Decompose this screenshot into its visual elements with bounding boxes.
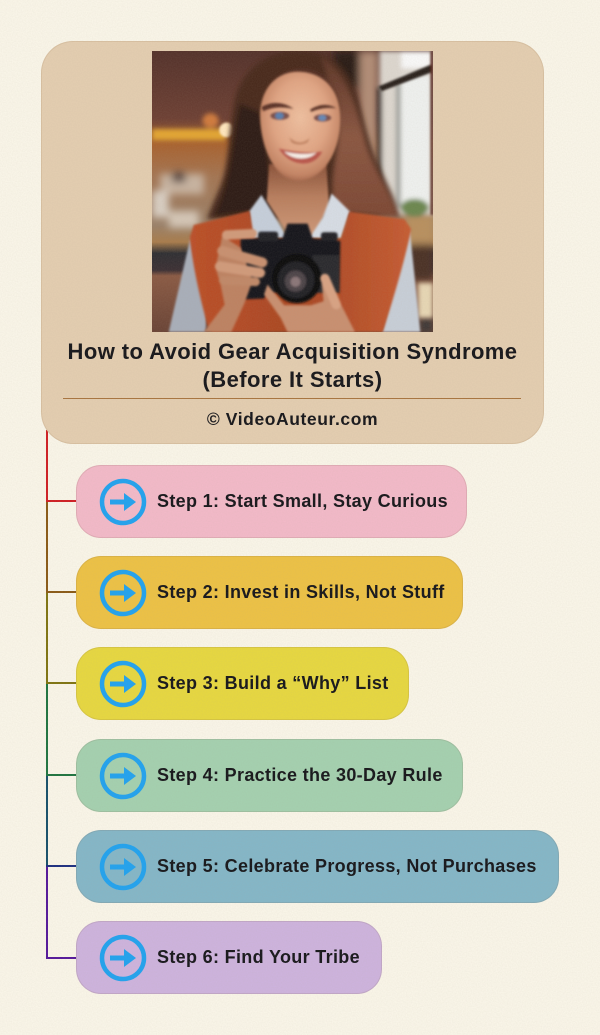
step 5 label: Step 5: Celebrate Progress, Not Purchases [157,856,537,876]
step 6 pill [76,921,382,994]
step 2 pill [76,556,463,629]
icon: arrow circle [100,660,146,708]
camera [233,224,340,303]
step 3 label: Step 3: Build a “Why” List [157,673,389,693]
icon: arrow circle [100,570,146,616]
step 2 label: Step 2: Invest in Skills, Not Stuff [157,582,445,602]
neck [267,164,329,238]
hair [207,50,400,219]
icon: arrow circle [100,934,146,982]
panel: header card [41,41,544,444]
icon: arrow circle [100,752,146,800]
face [260,72,340,181]
step 4 label: Step 4: Practice the 30-Day Rule [157,765,443,785]
icon: arrow circle [100,844,146,890]
credit: © VideoAuteur.com [207,409,378,429]
step 4 pill [76,739,463,812]
title: (Before It Starts) [203,366,382,392]
icon: arrow circle [100,478,146,526]
step 1 label: Step 1: Start Small, Stay Curious [157,491,448,511]
title [68,339,517,392]
title: How to Avoid Gear Acquisition Syndrome [68,339,517,364]
connector tree [46,430,76,959]
photo: woman holding camera [152,51,433,332]
divider [63,398,521,399]
shirt and collar [169,194,420,332]
step 6 label: Step 6: Find Your Tribe [157,947,360,967]
vest [190,211,411,332]
blurred room background [152,51,435,333]
step 1 pill [76,465,467,538]
step 5 pill [76,830,559,903]
step 3 pill [76,647,409,720]
hands [204,234,355,332]
